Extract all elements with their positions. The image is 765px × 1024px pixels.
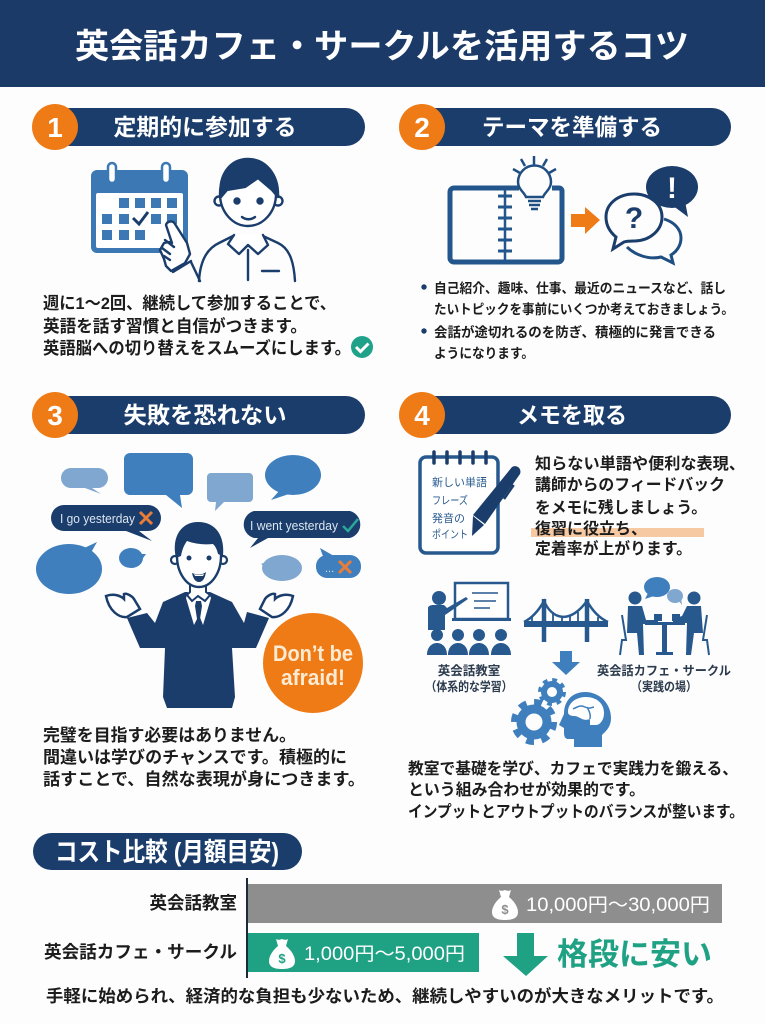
heading: tip 2: テーマを準備する bbox=[482, 114, 662, 140]
text: cost summary: 手軽に始められ、経済的な負担も少ないため、継続しやすいのが大きなメリットです。 bbox=[46, 986, 724, 1006]
text: tip 1 description bbox=[43, 294, 351, 358]
callout: Don't be afraid: Don’t be bbox=[273, 641, 353, 666]
icon: speech bubbles: ? bbox=[625, 202, 643, 235]
chart: monthly cost bars bbox=[44, 878, 722, 978]
text: tip 1 description: 英語脳への切り替えをスムーズにします。 bbox=[43, 338, 351, 358]
text: tip 4 combination description: 教室で基礎を学び、カフェで実践力を鍛える、 bbox=[408, 759, 738, 778]
bubble: ellipsis with cross bbox=[316, 548, 361, 578]
heading: cost comparison: コスト比較 (月額目安) bbox=[55, 837, 279, 867]
bubble: ellipsis with cross: ... bbox=[325, 563, 334, 575]
label: cafe row: 英会話カフェ・サークル bbox=[44, 942, 237, 962]
icon: notepad and pen: 新しい単語 bbox=[432, 475, 487, 489]
panel: tip 3 do not fear mistakes bbox=[32, 392, 365, 789]
heading: tip 1 bbox=[32, 104, 365, 150]
icon: calendar bbox=[91, 163, 188, 253]
text: tip 2 bullets: 自己紹介、趣味、仕事、最近のニュースなど、話し bbox=[434, 280, 726, 296]
heading: tip 1: 定期的に参加する bbox=[114, 114, 296, 140]
panel: tip 4 take notes bbox=[399, 392, 745, 821]
heading: tip 2: 2 bbox=[414, 112, 430, 143]
bar: cafe cost: 1,000円〜5,000円 bbox=[304, 944, 465, 965]
label: cafe circle: （実践の場） bbox=[631, 679, 697, 694]
icon: cafe conversation bbox=[620, 577, 709, 655]
text: note taking description: 講師からのフィードバック bbox=[535, 475, 725, 494]
highlight: orange marker bbox=[531, 528, 704, 537]
text: tip 2 bullets bbox=[421, 280, 734, 361]
text: tip 2 bullets: たいトピックを事前にいくつか考えておきましょう。 bbox=[434, 301, 734, 317]
panel: cost comparison bbox=[33, 833, 724, 1006]
icon: speech bubbles bbox=[606, 166, 698, 263]
arrow: blue down bbox=[552, 651, 580, 675]
text: note taking description: をメモに残しましょう。 bbox=[535, 498, 707, 517]
arrow: orange bbox=[571, 207, 600, 234]
text: tip 4 combination description bbox=[408, 759, 744, 821]
text: tip 2 bullets: 会話が途切れるのを防ぎ、積極的に発言できる bbox=[434, 324, 716, 340]
heading: tip 4: 4 bbox=[414, 400, 430, 431]
icon: notepad and pen: ポイント bbox=[432, 528, 468, 541]
icon: notebook with light bulb bbox=[450, 156, 562, 262]
icon: teal check badge bbox=[351, 336, 373, 358]
icon: classroom bbox=[427, 583, 511, 655]
heading: tip 3: 3 bbox=[47, 400, 63, 431]
illustration: man in suit shrugging bbox=[106, 522, 293, 708]
bar: classroom cost: 10,000円〜30,000円 bbox=[526, 895, 710, 916]
panel: tip 1 regular attendance bbox=[32, 104, 373, 358]
callout: Don't be afraid: afraid! bbox=[281, 665, 345, 690]
text: tip 4 combination description: インプットとアウトプットのバランスが整います。 bbox=[408, 802, 744, 821]
illustration: speech bubbles bbox=[36, 453, 321, 594]
icon: gears and brain head bbox=[514, 680, 611, 747]
heading: tip 3 bbox=[32, 392, 365, 438]
title banner bbox=[0, 0, 765, 87]
heading: tip 1: 1 bbox=[47, 112, 63, 143]
heading: tip 4: メモを取る bbox=[517, 402, 627, 428]
text: note taking description: 定着率が上がります。 bbox=[535, 539, 692, 558]
text: tip 4 combination description: という組み合わせが効果的です。 bbox=[408, 780, 645, 799]
heading: tip 3: 失敗を恐れない bbox=[124, 402, 286, 428]
panel: tip 2 prepare topics bbox=[399, 104, 734, 361]
text: tip 3 description: 話すことで、自然な表現が身につきます。 bbox=[43, 769, 365, 789]
label: cafe circle: 英会話カフェ・サークル bbox=[597, 663, 731, 678]
text: tip 3 description bbox=[43, 725, 365, 789]
bubble: I go yesterday: I go yesterday bbox=[60, 511, 135, 526]
bubble: I went yesterday: I went yesterday bbox=[250, 518, 338, 533]
text: note taking description: 復習に役立ち、 bbox=[535, 519, 647, 538]
icon: man pointing at calendar bbox=[160, 159, 295, 281]
bar: classroom cost: $ bbox=[501, 902, 509, 917]
callout: much cheaper: 格段に安い bbox=[557, 937, 712, 972]
text: note taking description: 知らない単語や便利な表現、 bbox=[535, 454, 745, 473]
bar: classroom cost bbox=[248, 884, 722, 923]
callout: Don't be afraid bbox=[263, 613, 363, 713]
bubble: I go yesterday bbox=[51, 505, 161, 541]
label: classroom bbox=[426, 663, 512, 694]
bar: cafe cost: $ bbox=[278, 951, 286, 966]
text: tip 3 description: 完璧を目指す必要はありません。 bbox=[43, 725, 296, 745]
label: cafe circle bbox=[597, 663, 731, 694]
heading: tip 2 bbox=[399, 104, 731, 150]
icon: speech bubbles: ! bbox=[667, 172, 677, 205]
icon: notepad and pen: 発音の bbox=[432, 511, 465, 525]
label: classroom: 英会話教室 bbox=[438, 663, 500, 678]
title banner: 英会話カフェ・サークルを活用するコツ bbox=[75, 28, 689, 66]
arrow: green down bbox=[503, 933, 548, 976]
icon: notepad and pen: フレーズ bbox=[432, 493, 468, 507]
text: tip 2 bullets: ようになります。 bbox=[434, 346, 534, 361]
bar: cafe cost bbox=[248, 933, 479, 972]
icon: notepad and pen bbox=[420, 452, 520, 553]
label: classroom row: 英会話教室 bbox=[150, 893, 237, 913]
text: tip 3 description: 間違いは学びのチャンスです。積極的に bbox=[43, 747, 347, 767]
text: tip 1 description: 週に1〜2回、継続して参加することで、 bbox=[43, 294, 336, 313]
text: tip 1 description: 英語を話す習慣と自信がつきます。 bbox=[43, 316, 307, 336]
label: classroom: （体系的な学習） bbox=[426, 679, 512, 694]
bubble: I went yesterday bbox=[244, 511, 360, 548]
heading: tip 4 bbox=[399, 392, 731, 438]
icon: bridge bbox=[524, 599, 608, 642]
text: note taking description bbox=[535, 454, 745, 558]
